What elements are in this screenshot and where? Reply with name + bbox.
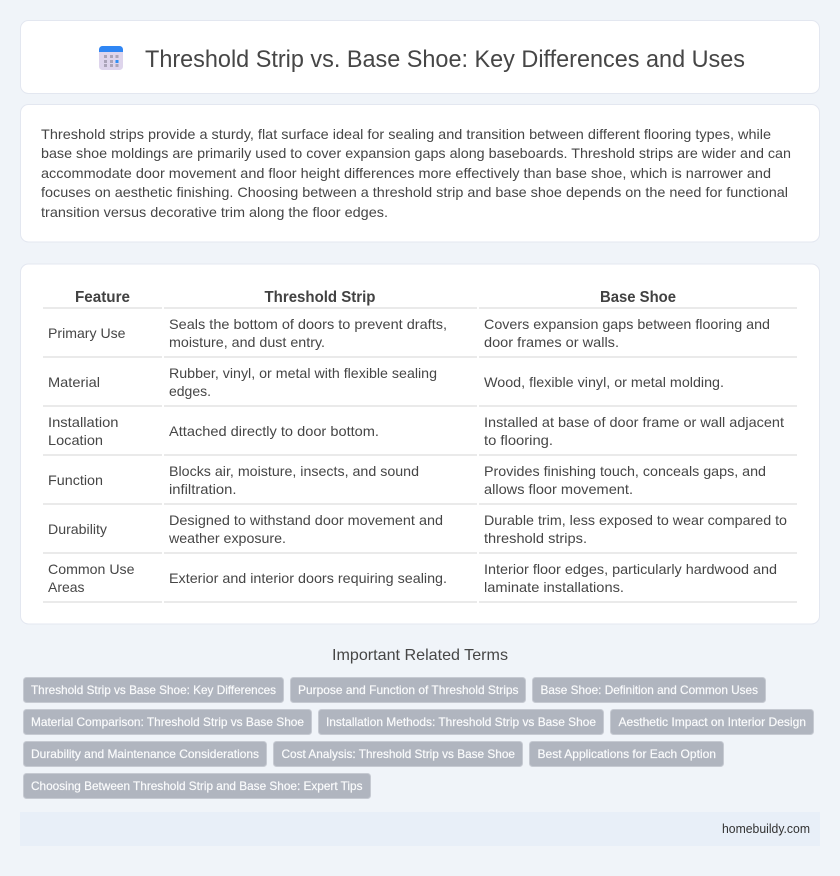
row: common use areas: Common Use (48, 561, 135, 577)
chip: durability and maintenance: Durability and Maintenance Considerations (31, 747, 259, 761)
chip: installation methods (318, 710, 604, 734)
row: primary use (43, 316, 797, 358)
chip: purpose and function (290, 678, 526, 702)
chip: material comparison: Material Comparison: Threshold Strip vs Base Shoe (31, 715, 304, 729)
row: material: Wood, flexible vinyl, or metal molding. (484, 374, 724, 390)
row: durability: Durability (48, 521, 107, 537)
heading: important related terms: Important Related Terms (332, 647, 508, 664)
row: function: allows floor movement. (484, 481, 633, 497)
table header row (43, 289, 797, 309)
chip: installation methods: Installation Methods: Threshold Strip vs Base Shoe (326, 715, 596, 729)
description text: focuses on aesthetic finishing. Choosing between a threshold strip and base shoe depends on the need for functional (41, 184, 788, 200)
row: common use areas: Areas (48, 579, 84, 595)
row: durability: weather exposure. (168, 530, 286, 546)
chip: durability and maintenance (24, 742, 266, 766)
title: Threshold Strip vs. Base Shoe: Key Differences and Uses (145, 46, 745, 73)
row: material: Material (48, 374, 100, 390)
table header row: Base Shoe (600, 289, 676, 306)
row: installation location (43, 414, 797, 456)
chip: best applications: Best Applications for Each Option (538, 747, 716, 761)
row: primary use: Seals the bottom of doors to prevent drafts, (169, 316, 447, 332)
table header row: Threshold Strip (264, 289, 376, 306)
row: installation location: Location (48, 432, 103, 448)
row: material (43, 365, 797, 407)
row: function: Blocks air, moisture, insects, and sound (169, 463, 419, 479)
row: material: edges. (169, 383, 211, 399)
row: common use areas: Interior floor edges, particularly hardwood and (484, 561, 777, 577)
row: durability: Durable trim, less exposed to wear compared to (484, 512, 787, 528)
row: common use areas: Exterior and interior doors requiring sealing. (169, 570, 447, 586)
row: function: Provides finishing touch, conceals gaps, and (484, 463, 766, 479)
chip: expert tips (24, 774, 370, 798)
chip: base shoe definition (532, 678, 766, 702)
icon: calendar (99, 46, 123, 70)
chip: aesthetic impact (610, 710, 814, 734)
chip: expert tips: Choosing Between Threshold Strip and Base Shoe: Expert Tips (31, 779, 362, 793)
chip: key differences: Threshold Strip vs Base Shoe: Key Differences (31, 683, 276, 697)
chip: best applications (530, 742, 724, 766)
chip: purpose and function: Purpose and Function of Threshold Strips (298, 683, 518, 697)
chip: material comparison (24, 710, 312, 734)
related term chips (24, 678, 814, 798)
chip: aesthetic impact: Aesthetic Impact on Interior Design (618, 715, 806, 729)
row: durability: threshold strips. (484, 530, 587, 546)
row: function (43, 463, 797, 505)
table header row: Feature (75, 289, 130, 306)
row: primary use: door frames or walls. (484, 334, 619, 350)
row: common use areas: laminate installations. (484, 579, 624, 595)
row: function: Function (48, 472, 103, 488)
row: primary use: Covers expansion gaps between flooring and (484, 316, 770, 332)
row: primary use: moisture, and dust entry. (169, 334, 325, 350)
description text: Threshold strips provide a sturdy, flat surface ideal for sealing and transition between different flooring types, while (41, 126, 771, 142)
row: installation location: Attached directly to door bottom. (169, 423, 379, 439)
panel: description (20, 104, 820, 242)
row: common use areas (43, 561, 797, 603)
chip: base shoe definition: Base Shoe: Definition and Common Uses (540, 683, 758, 697)
description text: accommodate door movement and floor height differences more effectively than base shoe, which is narrower and (41, 165, 771, 181)
description text (41, 126, 791, 220)
row: function: infiltration. (169, 481, 236, 497)
row: installation location: to flooring. (484, 432, 553, 448)
chip: cost analysis: Cost Analysis: Threshold Strip vs Base Shoe (282, 747, 515, 761)
row: installation location: Installed at base of door frame or wall adjacent (484, 414, 784, 430)
footer (20, 812, 820, 846)
footer site name: homebuildy.com (722, 822, 810, 836)
description text: transition versus decorative trim along the floor edges. (41, 204, 388, 220)
panel: comparison table (20, 264, 820, 624)
panel: title header (20, 20, 820, 94)
row: durability (43, 512, 797, 554)
row: primary use: Primary Use (48, 325, 126, 341)
chip: key differences (24, 678, 284, 702)
chip: cost analysis (274, 742, 522, 766)
description text: base shoe moldings are primarily used to cover expansion gaps along baseboards. Threshold strips are wider and can (41, 145, 791, 161)
row: material: Rubber, vinyl, or metal with flexible sealing (169, 365, 437, 381)
row: installation location: Installation (48, 414, 118, 430)
row: durability: Designed to withstand door movement and (169, 512, 443, 528)
